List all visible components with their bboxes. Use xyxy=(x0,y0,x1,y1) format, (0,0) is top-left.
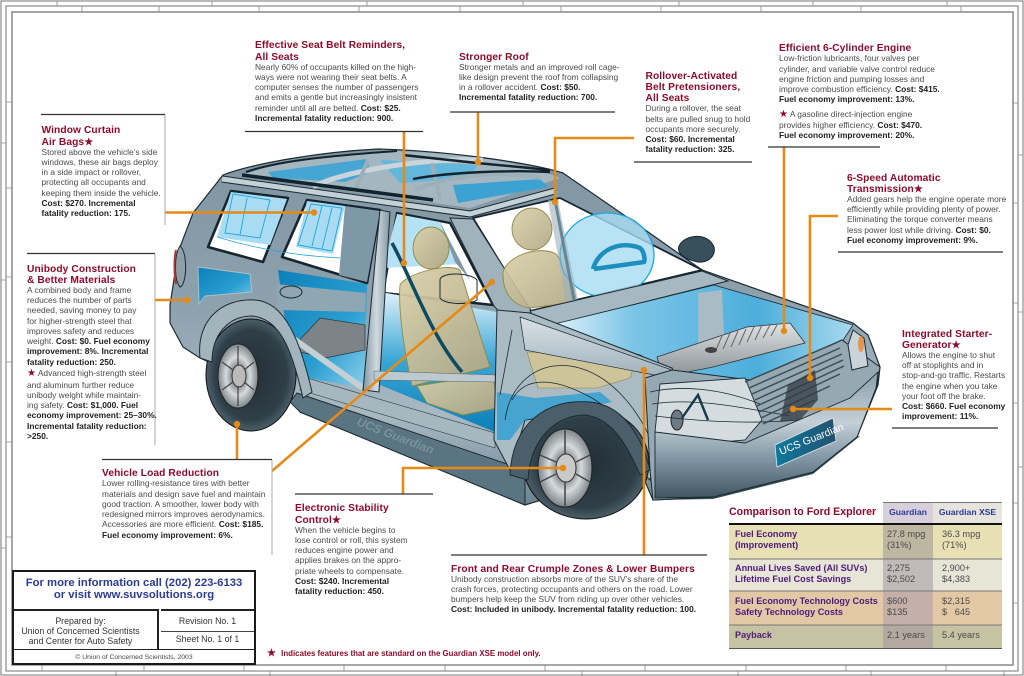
callout: rollover belt pretensioners: fatality reduction: 325. xyxy=(646,144,734,154)
license plate: UCS Guardian xyxy=(778,421,846,458)
callout: vehicle load reduction xyxy=(102,468,265,540)
callout: stronger roof: Incremental fatality reduction: 700. xyxy=(459,92,597,102)
callout: rollover belt pretensioners xyxy=(646,71,750,154)
callout: efficient engine: provides higher efficiency. Cost: $470. xyxy=(779,120,922,130)
callout: vehicle load reduction: materials and design save fuel and maintain xyxy=(102,489,265,499)
callout: integrated starter-generator: improvement: 11%. xyxy=(902,411,978,421)
callout: crumple zones: Unibody construction absorbs more of the SUV’s share of the xyxy=(451,574,678,584)
callout: crumple zones: Cost: Included in unibody. Incremental fatality reduction: 100. xyxy=(451,604,696,614)
callout: unibody construction: unibody weight while maintain- xyxy=(27,390,141,400)
callout: efficient engine: Fuel economy improvement: 20%. xyxy=(779,130,914,140)
callout: unibody construction: ★ Advanced high-strength steel xyxy=(27,368,146,379)
windshield xyxy=(473,198,702,311)
front door window xyxy=(383,213,493,305)
callout: vehicle load reduction: Vehicle Load Reduction xyxy=(102,468,219,479)
engine bay xyxy=(538,285,853,380)
callout: stronger roof xyxy=(459,52,620,102)
callout: unibody construction: Incremental fatality reduction: xyxy=(27,421,147,431)
callout: unibody construction: for higher-strength steel that xyxy=(27,316,132,326)
callout: stronger roof: Stronger Roof xyxy=(459,52,529,63)
engine xyxy=(657,323,805,373)
passenger seat xyxy=(503,208,576,308)
row labels: (Improvement) Annual Lives Saved (All SUVs) xyxy=(735,540,867,573)
callout: stronger roof: in a rollover accident. Cost: $50. xyxy=(459,82,580,92)
callout: unibody construction: ing safety. Cost: $1,000. Fuel xyxy=(27,400,138,410)
callout: window curtain air bags: fatality reduction: 175. xyxy=(42,208,130,218)
callout: integrated starter-generator: Cost: $660. Fuel economy xyxy=(902,401,1005,411)
callout: seat belt reminders: computer senses the number of passengers xyxy=(255,82,418,92)
callout: efficient engine: engine friction and pumping losses and xyxy=(779,74,924,84)
callout: electronic stability control: applies brakes on the appro- xyxy=(295,555,401,565)
callout: rollover belt pretensioners: Belt Pretensioners, xyxy=(646,82,740,93)
callout: vehicle load reduction: good traction. A smoother, lower body with xyxy=(102,499,259,509)
callout: efficient engine: cylinder, and variable valve control reduce xyxy=(779,64,935,74)
row labels: Lifetime Fuel Cost Savings Fuel Economy Technology Costs xyxy=(735,574,878,606)
callout: vehicle load reduction: redesigned mirrors improves aerodynamics. xyxy=(102,509,265,519)
dashboard air bag and steering wheel xyxy=(560,213,654,297)
callout: seat belt reminders xyxy=(255,40,418,123)
callout: rollover belt pretensioners: occupants more securely. xyxy=(646,124,740,134)
rocker with lettering xyxy=(290,393,525,505)
prepared by: Prepared by: xyxy=(55,616,106,626)
front door interior xyxy=(380,292,497,432)
callout: efficient engine: Efficient 6-Cylinder Engine xyxy=(779,43,911,54)
callout: efficient engine: improve combustion efficiency. Cost: $415. xyxy=(779,84,940,94)
callout: six-speed transmission: Added gears help the engine operate more xyxy=(847,194,1006,204)
column header: Guardian XSE: Guardian XSE xyxy=(939,507,996,517)
rear door window with curtain air bag xyxy=(217,200,380,283)
callout: unibody construction: economy improvement: 25–30%. xyxy=(27,410,157,420)
grille xyxy=(745,342,844,424)
sheet number: Sheet No. 1 of 1 xyxy=(176,634,239,644)
driver seat xyxy=(400,227,497,415)
callout: vehicle load reduction: Fuel economy improvement: 6%. xyxy=(102,530,233,540)
callout: crumple zones: bumpers help keep the SUV from riding up over other vehicles. xyxy=(451,594,684,604)
callout: rollover belt pretensioners: Cost: $60. Incremental xyxy=(646,134,735,144)
row labels: Safety Technology Costs Payback xyxy=(735,607,843,640)
callout: rollover belt pretensioners: Rollover-Activated xyxy=(646,71,737,82)
callout: integrated starter-generator: your foot off the brake. xyxy=(902,391,986,401)
callout: six-speed transmission: Eliminating the torque converter means xyxy=(847,214,993,224)
callout: unibody construction: Unibody Construction xyxy=(27,264,136,275)
callout: unibody construction: improves safety and reduces xyxy=(27,326,134,336)
callout: seat belt reminders: and emits a gentle but increasingly insistent xyxy=(255,92,417,102)
Guardian values: $2,502 $600 xyxy=(887,574,915,606)
callout: unibody construction: needed, saving money to pay xyxy=(27,305,136,315)
callout: integrated starter-generator: off at stoplights and in xyxy=(902,360,983,370)
row labels: Fuel Economy xyxy=(735,529,797,539)
row labels xyxy=(735,529,878,640)
headlight cutaway xyxy=(650,378,800,445)
callout: electronic stability control: Cost: $240. Incremental xyxy=(295,576,389,586)
seat belt driver xyxy=(392,243,462,372)
callout: six-speed transmission: Transmission★ xyxy=(847,184,923,195)
callout: efficient engine xyxy=(779,43,940,140)
callout: window curtain air bags xyxy=(42,125,161,218)
callout: vehicle load reduction: Accessories are more efficient. Cost: $185. xyxy=(102,519,263,529)
body shell xyxy=(170,149,880,505)
callout: integrated starter-generator: Generator★ xyxy=(902,340,961,351)
A pillar xyxy=(450,218,532,322)
callout: six-speed transmission xyxy=(847,173,1006,245)
callout: electronic stability control: priate wheels to compensate. xyxy=(295,566,404,576)
rear door interior xyxy=(276,270,367,388)
callout: unibody construction xyxy=(27,264,157,441)
callout: window curtain air bags: Stored above the vehicle’s side xyxy=(42,147,157,157)
rear tire xyxy=(206,319,296,431)
contact information: For more information call (202) 223-6133 xyxy=(26,577,242,589)
prepared by: and Center for Auto Safety xyxy=(29,636,132,646)
driver side mirror xyxy=(440,274,477,304)
rear wheel rim xyxy=(218,344,258,408)
callout: stronger roof: Stronger metals and an improved roll cage- xyxy=(459,62,620,72)
callout: unibody construction: fatality reduction: 250. xyxy=(27,357,116,367)
right headlight xyxy=(848,330,868,370)
footnote: ★ Indicates features that are standard on the Guardian XSE model only. xyxy=(267,648,541,659)
rear quarter blue panel xyxy=(198,267,252,304)
callout: unibody construction: >250. xyxy=(27,431,48,441)
callout: six-speed transmission: efficiently while providing plenty of power. xyxy=(847,204,1000,214)
callout: electronic stability control: Electronic Stability xyxy=(295,503,389,514)
roof xyxy=(222,151,560,214)
table title: Comparison to Ford Explorer xyxy=(729,506,876,518)
callout: seat belt reminders: Incremental fatality reduction: 900. xyxy=(255,113,393,123)
table backgrounds xyxy=(729,502,1002,649)
callout: seat belt reminders: All Seats xyxy=(255,52,299,63)
callout: efficient engine: ★ A gasoline direct-injection engine xyxy=(779,109,912,120)
callout: rollover belt pretensioners: All Seats xyxy=(646,93,689,104)
callout: six-speed transmission: less power lost while driving. Cost: $0. xyxy=(847,225,991,235)
front lower bumper shadow xyxy=(645,436,860,500)
taillight xyxy=(174,246,186,287)
callout: seat belt reminders: Nearly 60% of occupants killed on the high- xyxy=(255,62,416,72)
comparison table xyxy=(729,502,1002,649)
copyright: © Union of Concerned Scientists, 2003 xyxy=(75,654,193,661)
callout: integrated starter-generator: Allows the engine to shut xyxy=(902,350,995,360)
Guardian values: $135 2.1 years xyxy=(887,607,925,640)
front tire xyxy=(523,407,649,519)
callout: window curtain air bags: windows, these air bags deploy xyxy=(42,157,158,167)
front fender xyxy=(494,310,676,480)
callout: efficient engine: Low-friction lubricants, four valves per xyxy=(779,53,920,63)
prepared by xyxy=(14,609,159,649)
door sill bar xyxy=(374,371,495,382)
rear wheel arch xyxy=(200,300,312,398)
callout: electronic stability control: reduces engine power and xyxy=(295,545,394,555)
callout: window curtain air bags: keeping them inside the vehicle. xyxy=(42,188,161,198)
callout: six-speed transmission: 6-Speed Automatic xyxy=(847,173,941,184)
cowl xyxy=(530,271,728,328)
Guardian values: 27.8 mpg xyxy=(887,529,925,539)
copyright xyxy=(14,649,254,664)
callout: unibody construction: improvement: 8%. Incremental xyxy=(27,346,148,356)
front nose xyxy=(645,340,880,500)
callout: unibody construction: reduces the number of parts xyxy=(27,295,132,305)
front bumper xyxy=(655,372,878,498)
callout: electronic stability control: fatality reduction: 450. xyxy=(295,586,384,596)
contact information xyxy=(26,577,242,601)
callout: efficient engine: Fuel economy improvement: 13%. xyxy=(779,94,914,104)
callout: unibody construction: weight. Cost: $0. Fuel economy xyxy=(27,336,150,346)
callout: rollover belt pretensioners: During a rollover, the seat xyxy=(646,103,741,113)
prepared by: Union of Concerned Scientists xyxy=(21,626,140,636)
callout: crumple zones xyxy=(451,564,696,614)
contact information: or visit www.suvsolutions.org xyxy=(54,589,214,601)
callout: crumple zones: crash forces, protecting occupants and others on the road. Lower xyxy=(451,584,693,594)
front wheel arch xyxy=(510,402,650,480)
rocker with lettering: UCS Guardian xyxy=(355,415,436,457)
callout: rollover belt pretensioners: belts are pulled snug to hold xyxy=(646,114,750,124)
callout: unibody construction: & Better Materials xyxy=(27,275,115,286)
callout: electronic stability control: lose control or roll, this system xyxy=(295,535,408,545)
callout: stronger roof: like design prevent the roof from collapsing xyxy=(459,72,618,82)
front wheel rim xyxy=(538,429,592,507)
rear quarter window with curtain air bag xyxy=(208,191,288,262)
callout: integrated starter-generator xyxy=(902,329,1006,421)
callout: seat belt reminders: ways were not wearing their seat belts. A xyxy=(255,72,407,82)
passenger mirror xyxy=(679,236,714,262)
callout: seat belt reminders: Effective Seat Belt Reminders, xyxy=(255,40,405,51)
callout: window curtain air bags: Air Bags★ xyxy=(42,137,93,148)
callout: window curtain air bags: Window Curtain xyxy=(42,125,120,136)
callout: electronic stability control: Control★ xyxy=(295,515,341,526)
callout: vehicle load reduction: Lower rolling-resistance tires with better xyxy=(102,478,250,488)
callout: integrated starter-generator: the engine when you take xyxy=(902,381,997,391)
door sill lower band xyxy=(300,378,495,448)
callout: electronic stability control xyxy=(295,503,408,596)
callout: window curtain air bags: in a side impact or rollover, xyxy=(42,167,141,177)
passenger A pillar belt xyxy=(555,200,574,300)
title block xyxy=(12,570,256,665)
callout: window curtain air bags: protecting all occupants and xyxy=(42,177,146,187)
callout: crumple zones: Front and Rear Crumple Zones & Lower Bumpers xyxy=(451,564,695,575)
callout: integrated starter-generator: stop-and-go traffic. Restarts xyxy=(902,370,1005,380)
callout: integrated starter-generator: Integrated Starter- xyxy=(902,329,992,340)
Guardian XSE values: 36.3 mpg (71%) 2,900+ $4,383 $2,315 $ 645 5.4 years xyxy=(942,529,980,640)
callout: unibody construction: A combined body and frame xyxy=(27,285,131,295)
column header: Guardian: Guardian xyxy=(889,507,927,517)
callout: window curtain air bags: Cost: $270. Incremental xyxy=(42,198,136,208)
revision number: Revision No. 1 xyxy=(179,616,236,626)
B pillar xyxy=(363,210,390,392)
callout: electronic stability control: When the vehicle begins to xyxy=(295,525,396,535)
callout: unibody construction: and aluminum further reduce xyxy=(27,380,134,390)
Guardian values xyxy=(887,529,925,640)
callout: six-speed transmission: Fuel economy improvement: 9%. xyxy=(847,235,978,245)
callout: seat belt reminders: reminder until all are belted. Cost: $25. xyxy=(255,103,401,113)
Guardian values: (31%) 2,275 xyxy=(887,540,912,573)
revision number xyxy=(161,609,254,632)
